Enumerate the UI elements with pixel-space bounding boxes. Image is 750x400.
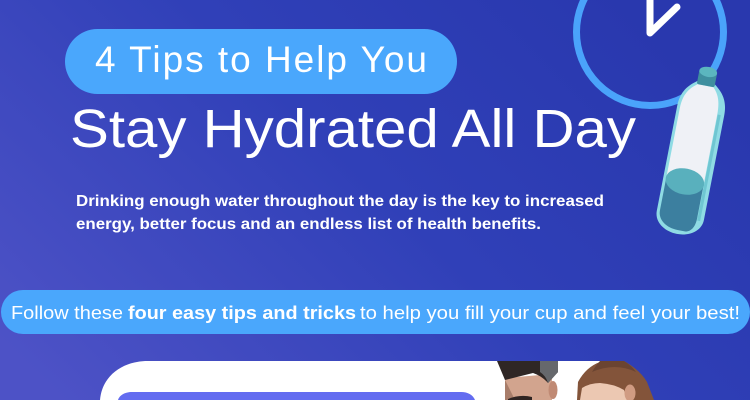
purple tip header [118,392,475,400]
callout banner: four easy tips and tricks [128,303,356,323]
callout banner: to help you fill your cup and feel your best! [360,303,740,323]
woman [577,361,654,400]
photo: couple [497,361,654,400]
icon: water bottle [653,62,733,238]
icon: clock [576,0,724,106]
intro paragraph: Drinking enough water throughout the day is the key to increased [76,193,604,210]
white panel [100,361,604,400]
callout banner [1,290,750,334]
callout banner: Follow these [11,303,123,323]
intro paragraph: energy, better focus and an endless list of health benefits. [76,216,541,233]
title: Stay Hydrated All Day [70,99,636,159]
pill heading [65,29,457,94]
man [497,361,558,400]
intro paragraph [76,193,604,233]
pill heading: 4 Tips to Help You [95,39,427,80]
